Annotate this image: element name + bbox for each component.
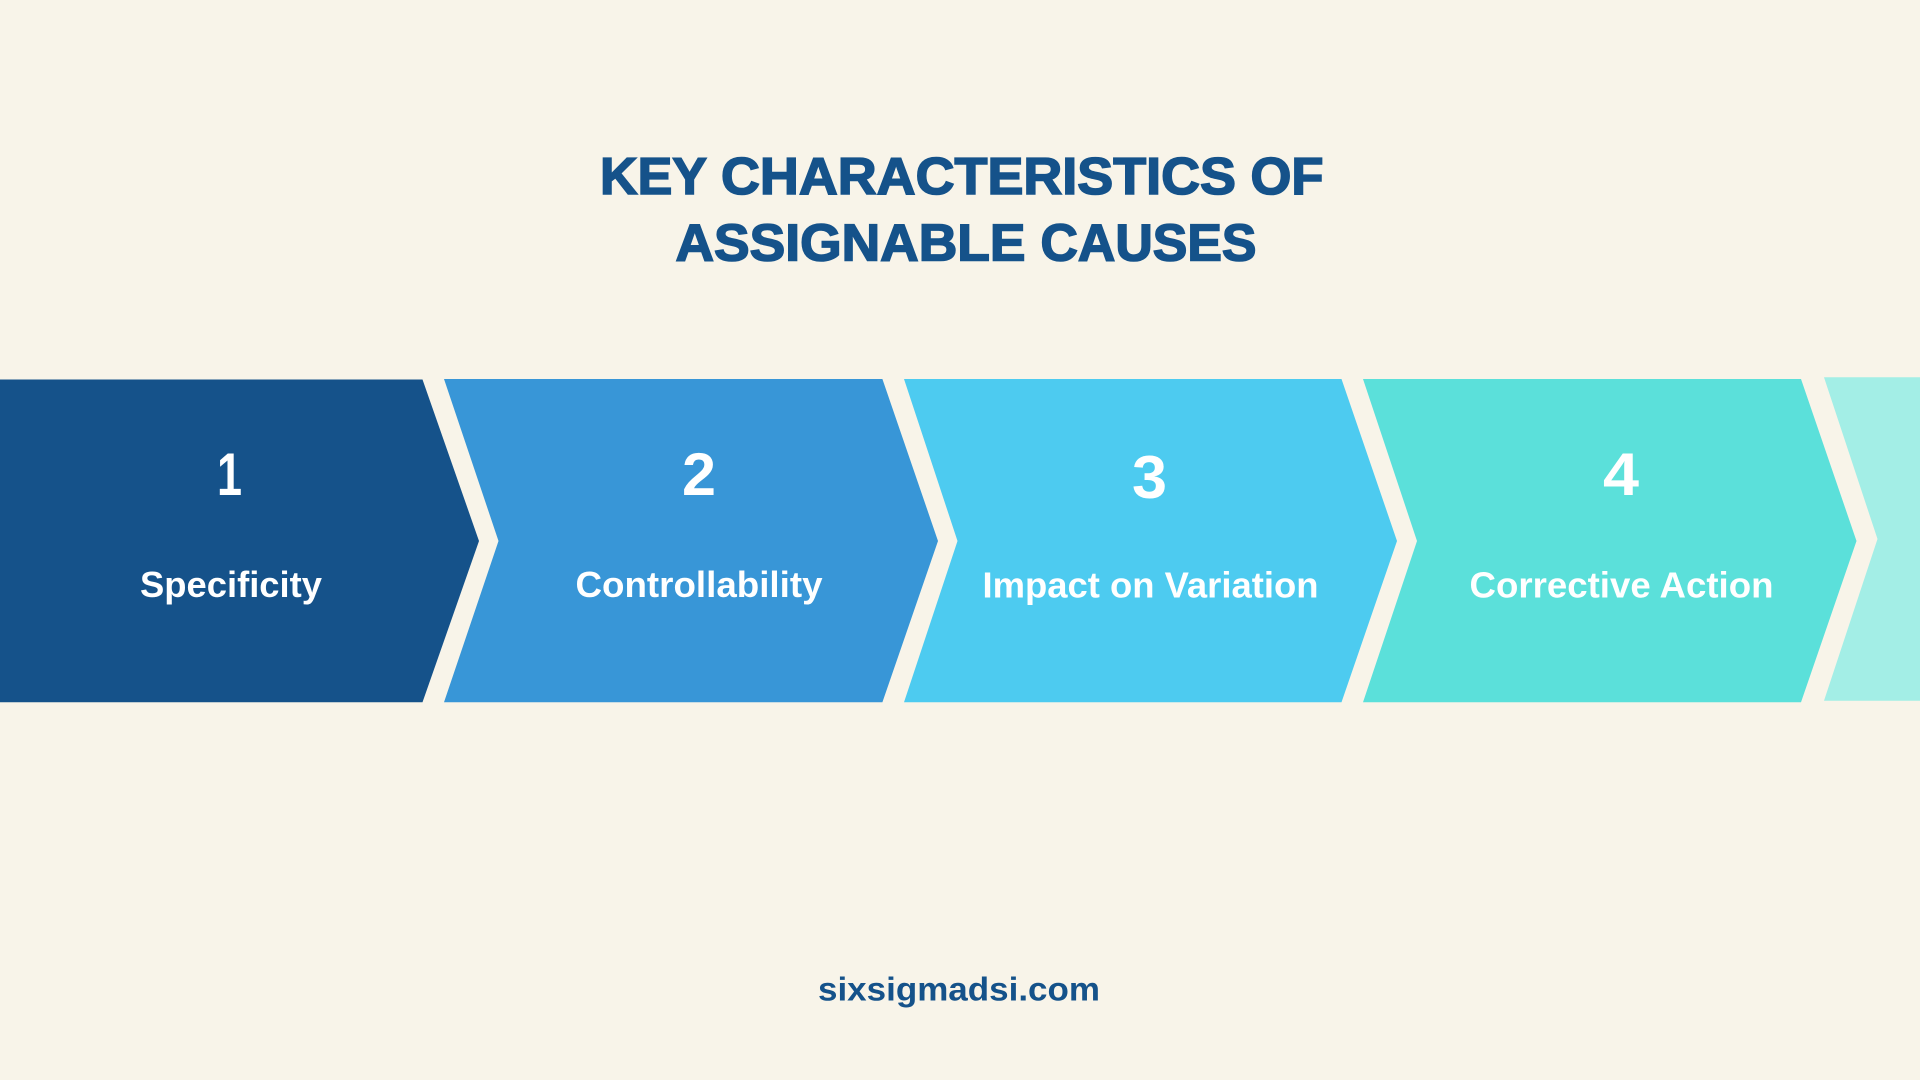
chevron 4: Corrective Action: 4 <box>1603 441 1640 508</box>
footer website: sixsigmadsi.com <box>818 970 1100 1008</box>
chevron 1: Specificity: Specificity <box>140 564 322 605</box>
title: CHARACTERISTICS <box>721 148 1236 206</box>
title <box>600 148 1324 272</box>
chevron 3: Impact on Variation: Impact on Variation <box>982 564 1318 606</box>
chevron 1: Specificity <box>0 380 479 702</box>
title: OF <box>1250 148 1324 206</box>
chevron 1: Specificity: 1 <box>217 441 242 508</box>
chevron 2: Controllability: 2 <box>682 441 716 508</box>
chevron 4: Corrective Action <box>1363 379 1856 702</box>
chevron 2: Controllability <box>444 379 938 702</box>
chevron 5: partial, cut off at right edge <box>1824 377 1920 701</box>
title: ASSIGNABLE <box>676 214 1026 272</box>
title: KEY <box>600 148 707 206</box>
chevron 3: Impact on Variation: 3 <box>1132 444 1167 511</box>
chevron 3: Impact on Variation <box>904 379 1397 702</box>
chevron 2: Controllability: Controllability <box>576 564 822 605</box>
title: CAUSES <box>1040 214 1256 272</box>
chevron 4: Corrective Action: Corrective Action <box>1470 564 1774 606</box>
